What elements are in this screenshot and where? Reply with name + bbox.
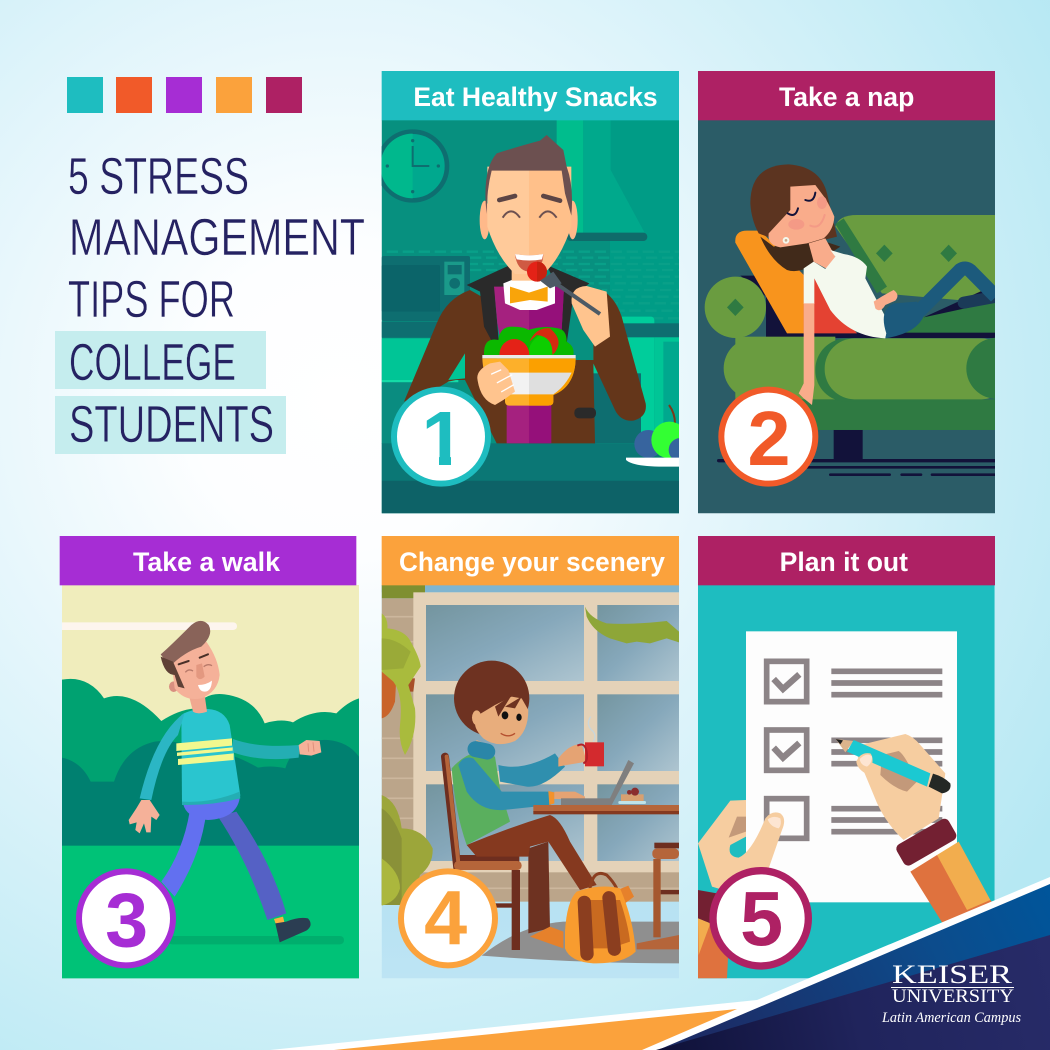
badge 5: 5 — [740, 877, 783, 963]
chair — [445, 757, 522, 950]
title — [55, 148, 365, 454]
wall and window — [382, 585, 679, 963]
panel 2: take a nap — [698, 71, 1028, 513]
header: eat healthy snacks: Eat Healthy Snacks — [413, 82, 658, 112]
sleeping woman — [750, 164, 996, 405]
logo: Keiser University: KEISER — [892, 960, 1013, 989]
badge 3 — [79, 871, 173, 965]
title: MANAGEMENT — [69, 209, 365, 267]
logo: Keiser University: Latin American Campus — [881, 1010, 1021, 1026]
header: plan it out — [698, 536, 995, 585]
icon: kitchen hood — [557, 120, 647, 241]
logo: Keiser University — [881, 960, 1021, 1026]
bushes — [62, 679, 359, 979]
salad bowl — [477, 327, 576, 406]
table and cake — [533, 788, 679, 814]
icon: wall clock — [378, 132, 447, 200]
plants — [382, 607, 679, 906]
header: take a walk: Take a walk — [133, 547, 281, 577]
badge 1 — [394, 390, 488, 484]
right chair — [637, 843, 679, 949]
panel 5: plan it out — [698, 536, 1004, 978]
seated student — [452, 661, 634, 948]
panel 4: change your scenery — [382, 536, 679, 978]
writing hand and pen — [836, 734, 1004, 925]
microwave — [382, 256, 470, 321]
table — [382, 443, 679, 513]
corner banner — [270, 877, 1050, 1050]
badge 3: 3 — [105, 878, 148, 964]
header: change your scenery: Change your scenery — [399, 547, 665, 577]
badge 2: 2 — [747, 396, 791, 482]
header: plan it out: Plan it out — [780, 547, 908, 577]
panel 3: take a walk — [58, 536, 359, 979]
brick wall pattern — [387, 252, 679, 318]
colour squares — [67, 77, 302, 113]
coffee mug — [577, 717, 604, 766]
header: take a nap: Take a nap — [779, 82, 914, 112]
laptop — [561, 760, 634, 805]
title: COLLEGE — [69, 334, 236, 392]
backpack — [565, 873, 636, 963]
title: 5 STRESS — [68, 148, 249, 206]
title: TIPS FOR — [68, 271, 235, 329]
checklist paper — [746, 631, 957, 902]
panel 1: eat healthy snacks — [378, 71, 693, 513]
badge 5 — [713, 871, 808, 966]
man eating — [404, 135, 646, 443]
counters — [382, 317, 679, 444]
badge 4: 4 — [424, 875, 467, 961]
badge 1: 1 — [421, 396, 465, 482]
header: take a nap — [698, 71, 995, 120]
walking man — [129, 621, 321, 942]
badge 4 — [401, 871, 495, 965]
far leg — [964, 297, 996, 303]
header: eat healthy snacks — [382, 71, 679, 120]
header: take a walk — [60, 536, 356, 585]
pillow — [735, 231, 805, 333]
left hand — [698, 800, 784, 978]
header: change your scenery — [382, 536, 679, 585]
fruit plate — [626, 404, 679, 467]
sofa — [705, 215, 1028, 475]
logo: Keiser University: UNIVERSITY — [892, 986, 1014, 1007]
badge 2 — [721, 390, 815, 484]
title: STUDENTS — [69, 396, 274, 454]
